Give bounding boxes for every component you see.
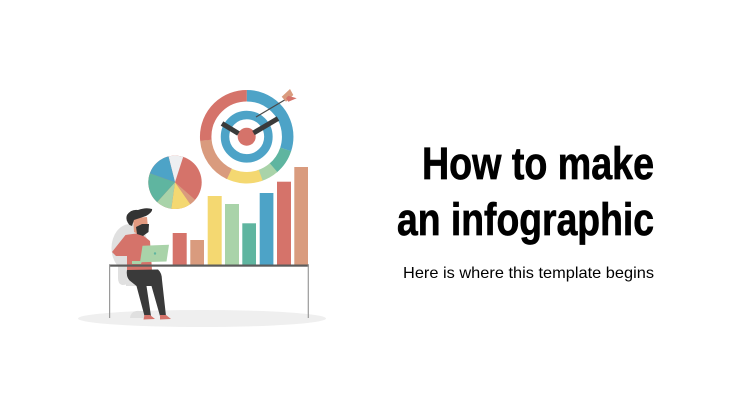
title: How to make [422, 138, 654, 189]
laptop [132, 245, 169, 264]
outer ring segments [189, 79, 305, 195]
bullseye [238, 128, 256, 146]
pie chart [148, 156, 202, 209]
title: an infographic [397, 194, 654, 245]
torso and arm [112, 233, 152, 270]
arrow [256, 89, 297, 117]
bar chart [173, 167, 308, 264]
target chart [189, 79, 305, 195]
title [397, 138, 654, 245]
head [126, 208, 152, 236]
chair [112, 224, 150, 318]
trousers and legs [127, 270, 166, 316]
person at desk [112, 208, 171, 320]
shoes [144, 315, 171, 320]
desk [109, 264, 309, 318]
target hands [222, 118, 278, 134]
inner ring [225, 115, 268, 158]
subtitle: Here is where this template begins [403, 265, 654, 282]
floor shadow [78, 310, 326, 327]
